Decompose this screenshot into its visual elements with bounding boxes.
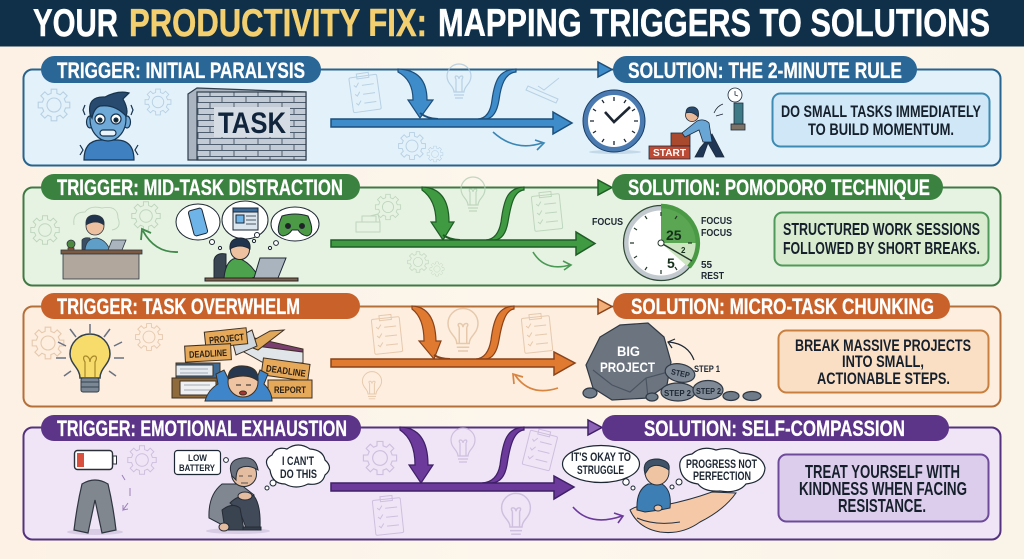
icon: light bulb [56,324,124,392]
trigger pill: TRIGGER: EMOTIONAL EXHAUSTION [57,416,347,441]
book: purple [244,345,303,363]
callout: it's okay to struggle [562,446,640,490]
connector: trigger to solution [361,420,602,483]
connector: trigger to solution [360,180,612,240]
icon: person in open hand [630,459,736,533]
book: blue left [176,363,220,378]
description box: TREAT YOURSELF WITH [805,461,960,482]
icon: big project boulder with steps: STEP 2 [696,387,722,396]
book: report [268,380,312,398]
title banner [0,0,1024,46]
icon: exhausted seated person [206,458,270,534]
decorative line art [38,64,559,162]
book: deadline: DEADLINE [265,363,306,380]
icon: small figure with clock [714,88,745,130]
callout: i can't do this: I CAN'T [282,456,314,468]
callout: it's okay to struggle: STRUGGLE [577,465,624,477]
book: bottom left [172,378,222,398]
small curved arrow [493,132,544,150]
icon: low battery [74,450,116,470]
book: project: PROJECT [209,332,245,347]
callout: it's okay to struggle: IT'S OKAY TO [571,452,631,464]
description box: BREAK MASSIVE PROJECTS [795,337,971,355]
trigger pill: TRIGGER: TASK OVERWHELM [57,294,300,319]
description box: INTO SMALL, [842,353,924,371]
timer numbers: 25 [666,227,682,243]
solution pill: SOLUTION: SELF-COMPASSION [644,416,905,441]
icon: pomodoro timer: FOCUS [701,216,732,227]
panel: mid-task distraction [24,174,1000,286]
icon: task brick wall [188,88,306,160]
description box [774,212,988,266]
trigger pill: TRIGGER: MID-TASK DISTRACTION [57,175,343,200]
icon: pomodoro timer: 2 [681,246,686,255]
callout: progress not perfection: PERFECTION [693,471,751,483]
icon: distracted person with thought bubbles [176,201,319,281]
solution pill: SOLUTION: MICRO-TASK CHUNKING [631,294,934,319]
stone labels: STEP [670,367,691,380]
flow arrow [331,232,595,255]
icon: overwhelmed person under stacked books [172,328,312,401]
callout: low battery: LOW [188,453,207,463]
panel: initial paralysis [24,56,1000,166]
thought: game controller [268,207,319,250]
connector: trigger to solution [360,299,612,359]
flow arrow [331,352,575,375]
thought: web page [222,201,268,243]
icon: big project boulder with steps: STEP 2 [664,389,692,398]
book: deadline: DEADLINE [189,348,227,361]
callout: progress not perfection [670,448,765,492]
icon: big project boulder with steps: PROJECT [600,359,655,375]
icon: pomodoro timer: 55 [701,260,713,271]
description box [778,454,988,522]
decorative line art [32,308,553,399]
small curved arrow [533,252,571,270]
description box: TO BUILD MOMENTUM. [808,121,954,139]
description box [778,330,988,392]
trigger pill: TRIGGER: INITIAL PARALYSIS [57,58,305,83]
book: open cover [245,330,284,350]
thought: phone [176,204,222,250]
icon: clock [583,90,645,154]
decorative line art [31,177,563,276]
callout: low battery: BATTERY [179,463,215,473]
callout: i can't do this: DO THIS [280,469,317,481]
start label: START [653,147,687,159]
icon: person at desk [61,215,142,279]
flow arrow [331,476,574,499]
callout: i can't do this [265,445,330,490]
person [205,366,272,401]
description box: ACTIONABLE STEPS. [817,370,950,388]
flow arrow [331,112,572,134]
panel: emotional exhaustion [24,415,1000,540]
icon: big project boulder with steps [583,323,761,401]
timer labels: FOCUS [592,217,623,228]
boulder label: BIG [617,343,640,359]
small curved arrow [573,507,623,523]
callout: low battery [174,450,228,474]
panel: task overwhelm [24,293,1000,406]
icon: pomodoro timer: REST [701,271,724,282]
description box: RESISTANCE. [838,495,926,516]
icon: pomodoro timer [592,206,732,282]
icon: pomodoro timer: FOCUS [701,228,732,239]
decorative line art [128,427,558,535]
solution pill: SOLUTION: THE 2-MINUTE RULE [628,58,902,83]
connector: trigger to solution [321,62,612,119]
solution pill: SOLUTION: POMODORO TECHNIQUE [628,175,930,200]
icon: overwhelmed person under stacked books: REPORT [274,385,306,396]
title: your: YOUR [33,2,118,45]
callout: progress not perfection: PROGRESS NOT [686,459,757,471]
description box [772,94,990,146]
wall label: TASK [218,107,286,140]
icon: anxious person [80,92,138,160]
small green arrow [141,229,178,252]
icon: big project boulder with steps: STEP 1 [694,364,720,374]
icon: pomodoro timer: 5 [667,255,675,271]
title: productivity fix: PRODUCTIVITY FIX: [129,2,427,45]
icon: gray trousers [67,475,130,535]
icon: person pushing start block [649,107,724,159]
small curved arrow [513,374,558,391]
